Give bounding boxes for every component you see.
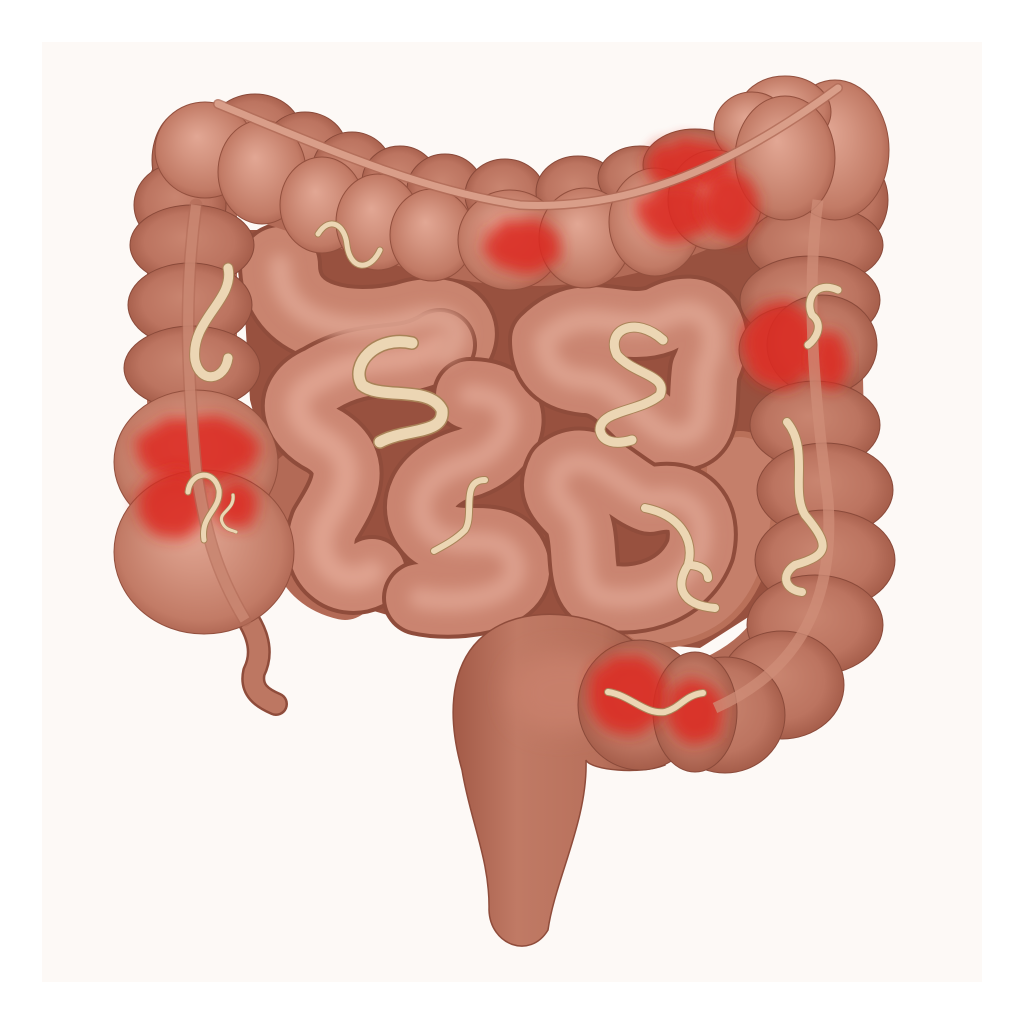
- worm: small bowel lower right: [645, 508, 715, 608]
- rectum and sigmoid: [453, 614, 737, 946]
- worm: small bowel left: [359, 342, 442, 442]
- ascending colon (left): [114, 108, 294, 634]
- loop: centre small bowel: [420, 395, 515, 601]
- descending colon (right): [665, 150, 895, 773]
- small intestine loops: [280, 265, 740, 610]
- worm: transverse colon: [318, 224, 380, 265]
- loop: lower right small bowel: [556, 463, 702, 599]
- worm: descending colon lower: [786, 422, 823, 592]
- worm: descending colon upper: [808, 287, 838, 345]
- transverse colon: [155, 76, 889, 290]
- worm: ascending colon: [195, 268, 229, 377]
- worm: sigmoid: [608, 692, 703, 712]
- worm: caecum large: [188, 475, 219, 540]
- worm: caecum small: [221, 495, 236, 532]
- base tube of the large intestine: [192, 135, 823, 712]
- loop: left small bowel: [298, 345, 440, 578]
- mesenteric bands (taeniae): [188, 88, 838, 708]
- appendix: [225, 590, 276, 704]
- inflamed patches: [135, 139, 848, 744]
- loop: upper right small bowel: [545, 312, 713, 436]
- shadow mass behind the small intestine: [240, 230, 775, 648]
- worm: small bowel upper right: [600, 327, 663, 442]
- worm: small bowel centre: [434, 480, 485, 551]
